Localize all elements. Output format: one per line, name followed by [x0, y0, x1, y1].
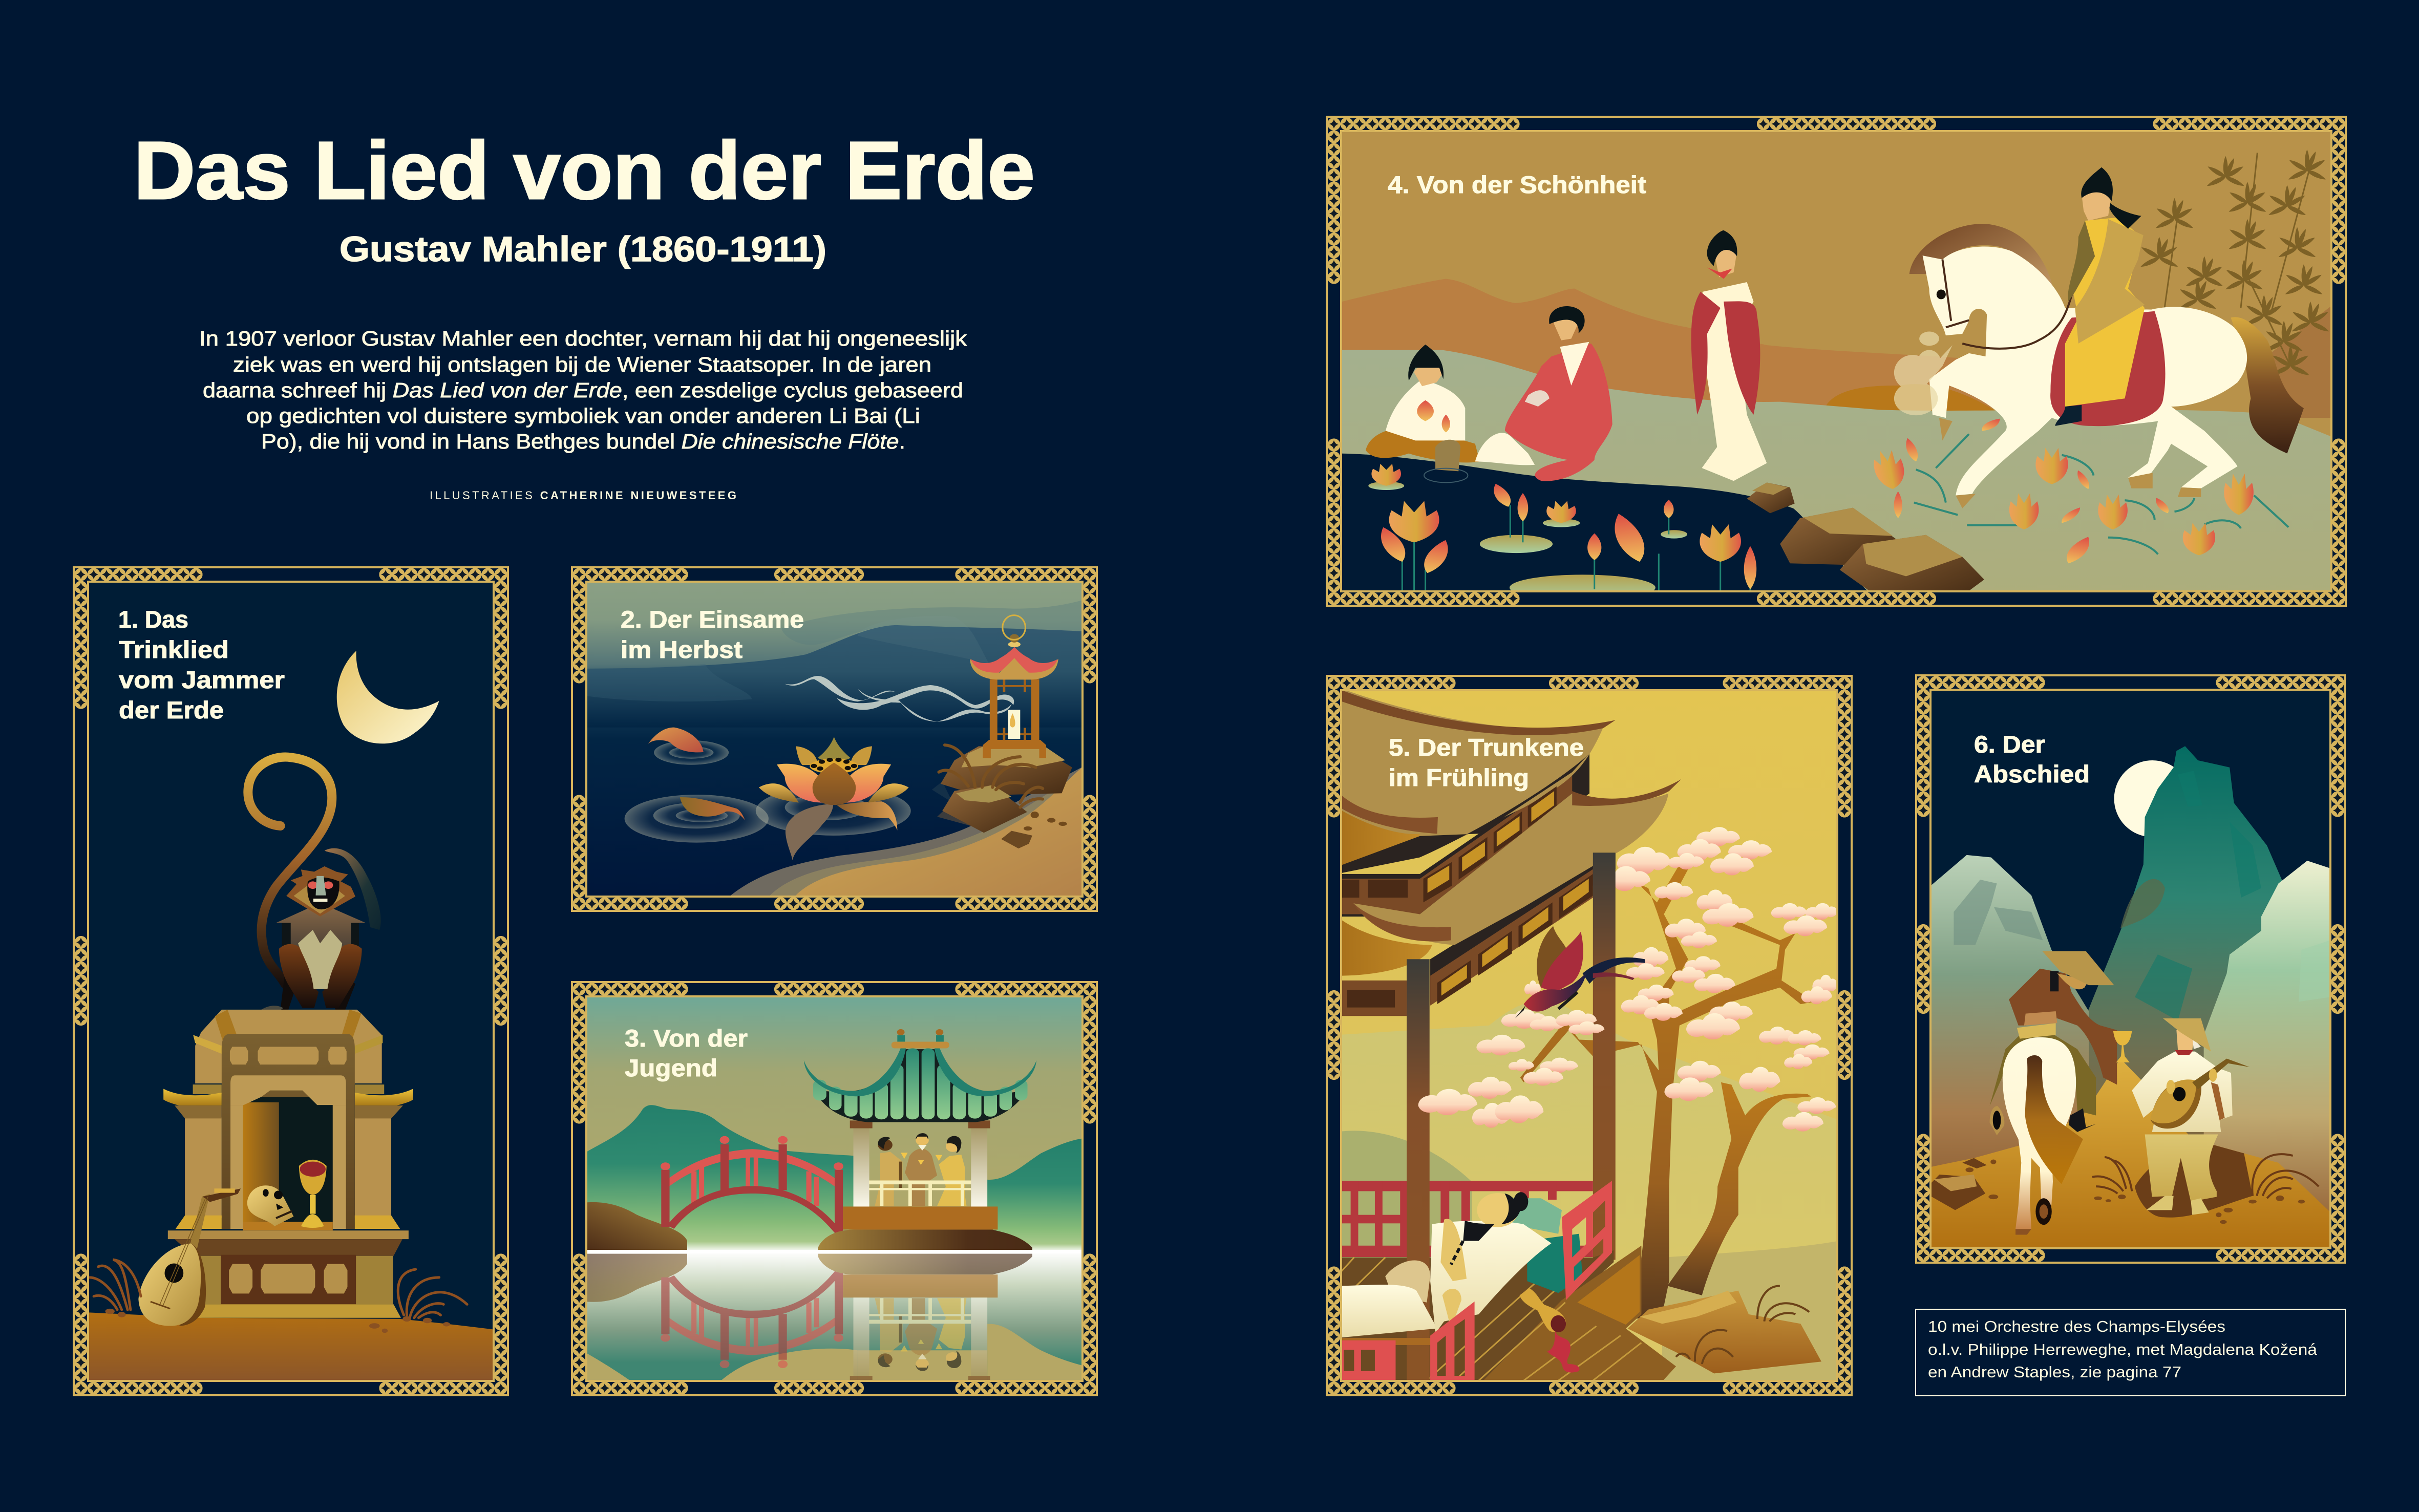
concert info box: 10 mei Orchestre des Champs-Elysées	[1928, 1317, 2225, 1335]
horse breath	[1894, 332, 1953, 415]
cherry tree	[1520, 864, 1814, 1319]
standing woman	[1691, 230, 1767, 481]
ground	[1928, 1059, 2333, 1253]
intro text: op gedichten vol duistere symboliek van onder anderen Li Bai (Li	[246, 404, 920, 428]
panel 5: Der Trunkene im Frühling	[1327, 676, 1852, 1395]
horse	[1909, 224, 2304, 508]
label 6: 6. Der	[1974, 731, 2045, 758]
floating petals	[648, 728, 704, 752]
label 3	[625, 1025, 748, 1081]
frame 5	[1327, 676, 1852, 1395]
icon: crescent moon	[337, 651, 439, 743]
chalice	[299, 1160, 327, 1228]
mountains	[584, 1105, 858, 1252]
bird	[1515, 926, 1645, 1018]
rocks	[1747, 482, 1984, 595]
frame 6	[1916, 675, 2345, 1263]
pond	[1336, 454, 1873, 595]
label 1: Trinklied	[119, 636, 229, 663]
illustration 3	[584, 995, 1086, 1383]
musician	[2132, 1018, 2250, 1215]
red front railings	[1337, 1181, 1612, 1383]
mountains	[2086, 746, 2333, 1253]
concert info box: en Andrew Staples, zie pagina 77	[1928, 1363, 2181, 1381]
label 1: vom Jammer	[119, 666, 285, 693]
lake	[584, 1252, 1086, 1382]
intro text: In 1907 verloor Gustav Mahler een dochter, vernam hij dat hij ongeneeslijk	[199, 327, 967, 350]
horse and rider	[1990, 951, 2132, 1234]
concert info box: o.l.v. Philippe Herreweghe, met Magdalena Kožená	[1928, 1340, 2318, 1358]
label 3: 3. Von der	[625, 1025, 748, 1052]
back railing	[1337, 1181, 1593, 1257]
title: Das Lied von der Erde	[134, 124, 1035, 216]
blossoms right of pillar	[1599, 827, 1838, 1132]
monkey	[248, 757, 381, 1024]
pond lotus flowers	[1371, 464, 1756, 592]
frame 4	[1327, 117, 2346, 606]
panel 6: Der Abschied	[1916, 675, 2345, 1263]
intro text	[199, 327, 967, 453]
rocks	[932, 744, 1072, 848]
label 1	[118, 606, 285, 723]
label 2: 2. Der Einsame	[621, 606, 804, 633]
illustrator credit: ILLUSTRATIES CATHERINE NIEUWESTEEG	[430, 489, 736, 502]
illustration 6	[1928, 687, 2333, 1253]
label 1: 1. Das	[118, 606, 188, 633]
frame 2	[572, 567, 1097, 911]
illustration 1	[88, 580, 495, 1382]
grass and pebbles	[90, 1260, 467, 1318]
pavilion roof	[1337, 687, 1681, 1016]
lily pads	[1368, 482, 1687, 601]
intro text: Po), die hij vond in Hans Bethges bundel Die chinesische Flöte .	[261, 430, 905, 453]
grass and pebbles	[2092, 1154, 2319, 1198]
illustration 2	[584, 582, 1086, 898]
label 6	[1974, 731, 2090, 787]
spilled goblet	[1519, 1288, 1579, 1373]
label 6: Abschied	[1974, 760, 2090, 787]
panel 1: Das Trinklied vom Jammer der Erde	[74, 567, 508, 1395]
lantern pagoda	[970, 615, 1058, 758]
intro text: daarna schreef hij Das Lied von der Erde , een zesdelige cyclus gebaseerd	[203, 378, 963, 402]
pavilion roof	[804, 1029, 1036, 1122]
three figures	[875, 1133, 967, 1206]
fallen flowers	[1871, 417, 2288, 565]
illustration 4	[1336, 130, 2337, 601]
pillar front	[1407, 959, 1430, 1383]
bamboo	[2140, 150, 2330, 377]
label 2	[621, 606, 804, 663]
icon: moon	[2114, 760, 2191, 837]
bed with sleeping man	[1337, 1192, 1583, 1345]
label 5	[1389, 734, 1584, 791]
label 5: 5. Der Trunkene	[1389, 734, 1584, 761]
water ripples	[625, 740, 911, 843]
intro text: ziek was en werd hij ontslagen bij de Wiener Staatsoper. In de jaren	[233, 353, 931, 376]
bridge and pavilion	[584, 1120, 1032, 1250]
lute	[138, 1188, 241, 1326]
reeds	[939, 745, 1043, 807]
label 4: 4. Von der Schönheit	[1388, 171, 1646, 198]
concert info box	[1916, 1309, 2345, 1396]
panel 2: Der Einsame im Herbst	[572, 567, 1097, 911]
blossoms on the left branch	[1418, 981, 1604, 1128]
railing	[869, 1180, 971, 1206]
lotus	[759, 737, 909, 860]
label 1: der Erde	[119, 696, 224, 723]
frame 3	[572, 982, 1097, 1395]
smoke	[785, 676, 1014, 721]
reflection	[584, 1254, 1032, 1383]
meadow	[1336, 350, 2337, 595]
rider	[2055, 167, 2145, 426]
panel 3: Von der Jugend	[572, 982, 1097, 1395]
shrine	[163, 1010, 413, 1318]
subtitle: Gustav Mahler (1860-1911)	[339, 229, 826, 269]
rocks and grass	[1627, 1286, 1821, 1373]
shore	[728, 765, 1086, 898]
frame 1	[74, 567, 508, 1395]
seated woman with vase	[1366, 345, 1480, 482]
illustration 5	[1337, 685, 1842, 1386]
goblet	[2113, 1031, 2132, 1062]
pillars	[1593, 853, 1616, 1260]
panel 4: Von der Schönheit	[1327, 117, 2346, 606]
skull	[247, 1185, 293, 1226]
label 3: Jugend	[625, 1054, 717, 1081]
label 2: im Herbst	[621, 636, 742, 663]
deck	[1337, 1246, 1676, 1386]
kneeling woman in red	[1475, 306, 1612, 481]
label 5: im Frühling	[1389, 764, 1529, 791]
